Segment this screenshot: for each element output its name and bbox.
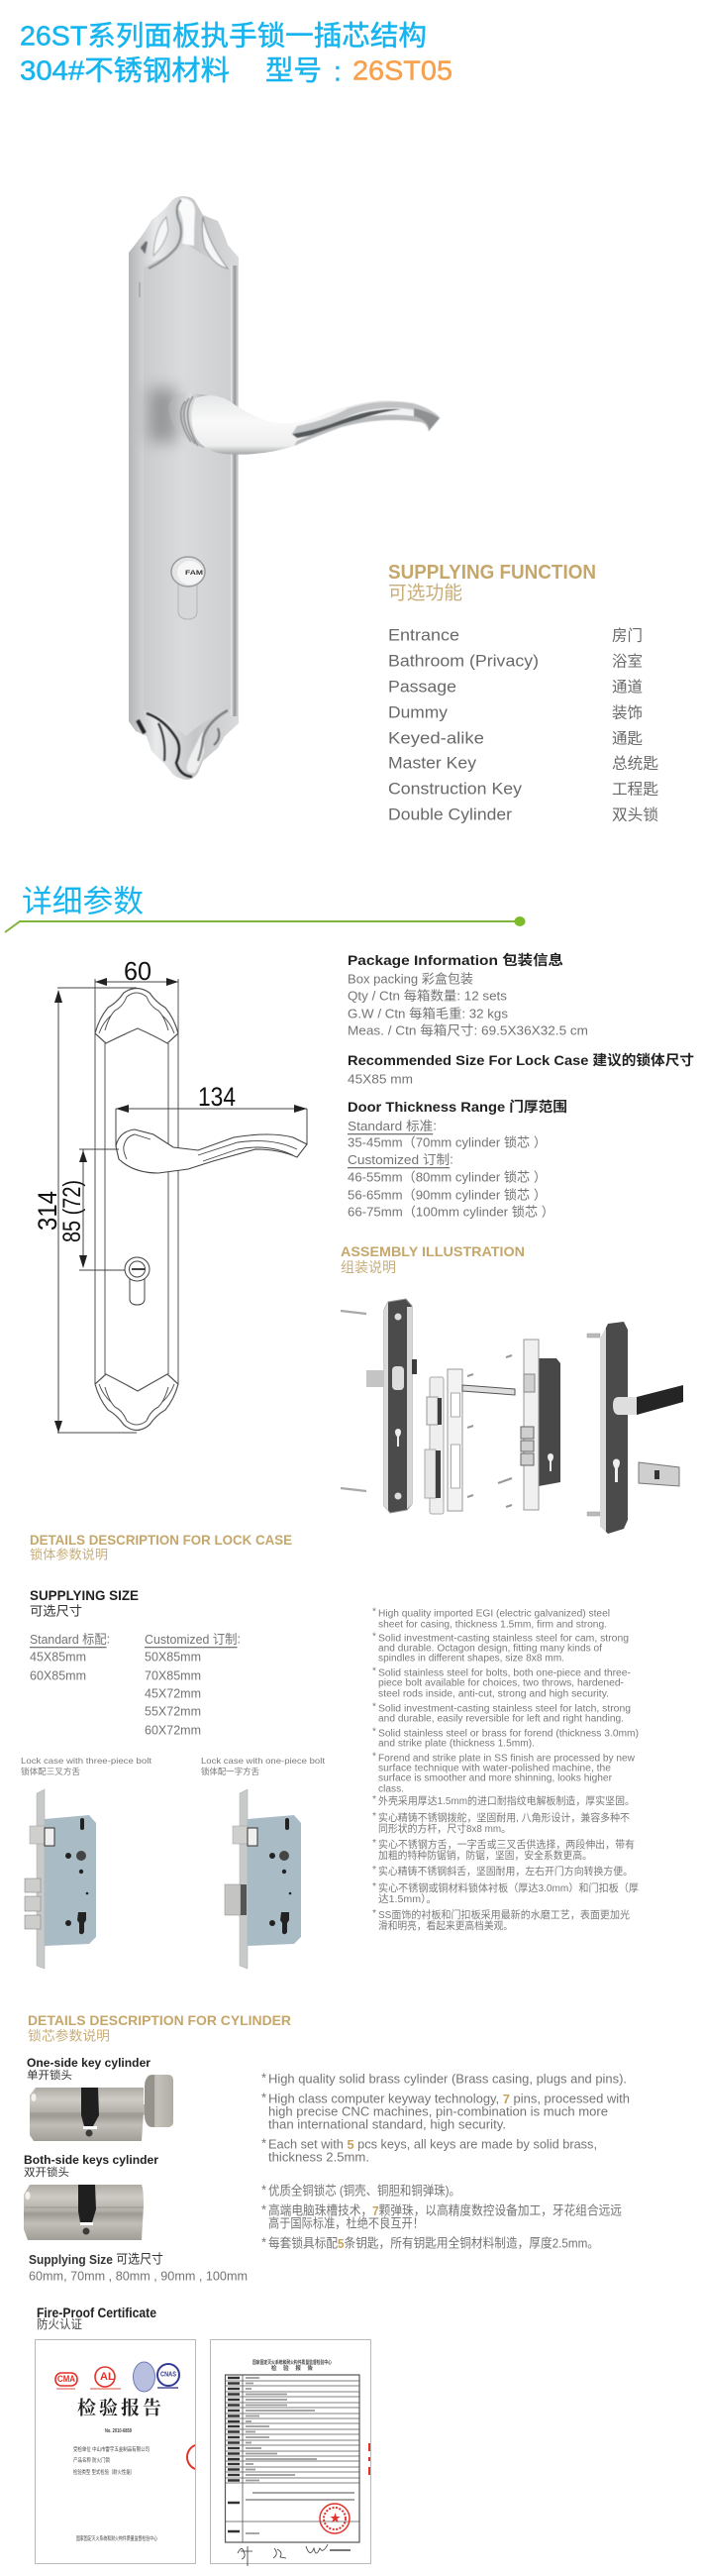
chinese feature list: * <box>372 1864 376 1876</box>
report header: 检 验 报 告 <box>271 2364 313 2372</box>
function list: 通道 <box>612 678 643 696</box>
fire-proof certificate heading: 防火认证 <box>37 2316 82 2331</box>
certificate: cover page <box>36 2340 196 2564</box>
function list: 房门 <box>612 626 643 644</box>
english feature list: spindles in different shapes, size 8x8 mm. <box>378 1653 564 1664</box>
supplying size: 45X85mm <box>30 1649 86 1664</box>
english feature list: surface is smoother and more shinning, looks higher <box>378 1773 613 1783</box>
signatures <box>238 2544 351 2566</box>
chinese feature list: 实心不锈钢方舌，一字舌或三叉舌供选择，两段伸出，带有 <box>378 1838 635 1851</box>
english feature list: Solid stainless steel for bolts, both one-piece and three- <box>378 1668 631 1678</box>
icon: CNAS logo: CNAS <box>160 2372 176 2378</box>
heading: DETAILS DESCRIPTION FOR LOCK CASE <box>30 1532 292 1548</box>
door thickness: 56-65mm（90mm cylinder 锁芯 ） <box>348 1187 547 1203</box>
stamp fragment on edge <box>368 2443 370 2475</box>
heading <box>28 2012 291 2043</box>
door thickness: Door Thickness Range 门厚范围 <box>348 1099 567 1115</box>
english feature list: Solid investment-casting stainless steel for latch, strong <box>378 1704 631 1714</box>
chinese feature list: * <box>372 1810 376 1822</box>
mortise lock body <box>521 1340 560 1510</box>
long screws <box>341 1311 366 1491</box>
chinese feature list: * <box>372 1793 376 1805</box>
chinese feature list: 加粗的特种防锯销，防锯，坚固，安全系数更高。 <box>378 1849 592 1862</box>
supplying size: 55X72mm <box>145 1704 201 1718</box>
heading: SUPPLYING FUNCTION <box>388 562 596 584</box>
chinese cylinder features: * <box>261 2182 266 2198</box>
chinese feature list: SS面饰的衬板和门扣板采用最新的水磨工艺，表面更加光 <box>378 1908 630 1921</box>
panel: lock case details <box>21 1532 639 1932</box>
lock case captions: 锁体配三叉方舌 <box>21 1767 80 1776</box>
panel: package information <box>348 952 694 1219</box>
icon: CMA logo <box>55 2373 77 2389</box>
english cylinder features: High quality solid brass cylinder (Brass casing, plugs and pins). <box>268 2071 627 2087</box>
dimension numbers: 60 <box>124 956 151 986</box>
supplying size: SUPPLYING SIZE <box>30 1587 139 1603</box>
function list: Entrance <box>388 626 459 644</box>
english feature list: * <box>372 1666 376 1676</box>
english feature list: * <box>372 1631 376 1643</box>
english feature list <box>372 1607 639 1795</box>
supplying size: 60X72mm <box>145 1722 201 1738</box>
handle outline <box>116 1129 307 1173</box>
english feature list: * <box>372 1702 376 1712</box>
lock case photo: one-piece bolt <box>225 1789 301 1969</box>
panel: cylinder details <box>24 2012 630 2283</box>
keyhole with cylinder <box>171 557 205 619</box>
bottom finial chrome <box>138 710 228 777</box>
english cylinder features: * <box>261 2136 266 2150</box>
certificate: test report page <box>210 2340 370 2566</box>
inner back plate <box>366 1299 417 1513</box>
chinese feature list: * <box>372 1880 376 1892</box>
title: : <box>334 55 342 87</box>
title: 304#不锈钢材料 <box>20 55 230 85</box>
english feature list: steel rods inside, anti-cut, strong and high security. <box>378 1688 609 1700</box>
cylinder labels <box>24 2056 158 2179</box>
report details <box>73 2428 157 2542</box>
chinese feature list: 同形状的方杆，尺寸8x8 mm。 <box>378 1822 511 1835</box>
package info: Qty / Ctn 每箱数量: 12 sets <box>348 989 508 1003</box>
report header: 国家固定灭火系统和耐火构件质量监督检验中心 <box>252 2359 332 2366</box>
chinese cylinder features <box>261 2182 622 2251</box>
english cylinder features: than international standard, high security. <box>268 2116 506 2132</box>
report details: 国家固定灭火系统和耐火构件质量监督检验中心 <box>76 2534 157 2542</box>
icon: CAL logo <box>90 2367 121 2389</box>
heading: detailed parameters <box>5 884 525 932</box>
icon: blue round seal <box>133 2362 154 2392</box>
english feature list: * <box>372 1752 376 1762</box>
english feature list: surface technique with water-polished machine, the <box>378 1764 611 1773</box>
english cylinder features: thickness 2.5mm. <box>268 2150 369 2164</box>
english feature list: sheet for casing, thickness 1.5mm, firm and strong. <box>378 1619 607 1631</box>
function list: 浴室 <box>612 652 643 670</box>
report title: 检 验 报 告 <box>77 2394 161 2419</box>
dimension drawing <box>33 956 307 1433</box>
cylinder labels: Both-side keys cylinder <box>24 2153 158 2167</box>
cylinder photo: both-side keys <box>24 2185 144 2240</box>
dimension numbers: 134 <box>198 1082 236 1112</box>
supplying size: 70X85mm <box>145 1668 201 1682</box>
function list: 工程匙 <box>612 781 658 799</box>
english feature list: Forend and strike plate in SS finish are processed by new <box>378 1754 636 1764</box>
english feature list: and strike plate (thickness 1.5mm). <box>378 1738 535 1750</box>
lever handle <box>168 392 441 455</box>
package info: Package Information 包装信息 <box>348 952 563 968</box>
package info: G.W / Ctn 每箱毛重: 32 kgs <box>348 1007 509 1020</box>
heading <box>388 562 596 604</box>
chinese cylinder features: * <box>261 2235 266 2249</box>
english feature list: Solid stainless steel or brass for forend (thickness 3.0mm) <box>378 1728 639 1740</box>
outer plate with lever <box>587 1322 683 1534</box>
supplying size: 45X72mm <box>145 1686 201 1700</box>
forend strip <box>448 1369 515 1511</box>
recommended size: Recommended Size For Lock Case 建议的锁体尺寸 <box>348 1052 694 1068</box>
door thickness: 35-45mm（70mm cylinder 锁芯 ） <box>348 1135 547 1149</box>
cylinder labels: 双开锁头 <box>24 2165 69 2179</box>
chinese feature list: 实心不锈钢或铜材料锁体衬板（厚达3.0mm）和门扣板（厚 <box>378 1881 639 1894</box>
chinese feature list <box>372 1793 639 1932</box>
dimension numbers: 85 (72) <box>58 1180 86 1242</box>
lever shadow on plate <box>149 388 176 442</box>
function list: 通匙 <box>612 729 643 747</box>
package info <box>348 952 588 1038</box>
supplying size: Supplying Size 可选尺寸 <box>29 2251 163 2267</box>
function list: 总统匙 <box>612 755 658 773</box>
report details: 受检单位 中山市雷宇五金制品有限公司 <box>73 2445 150 2453</box>
function list: Keyed-alike <box>388 729 484 747</box>
heading <box>30 1532 292 1561</box>
panel: supplying function <box>388 562 658 824</box>
chinese feature list: * <box>372 1837 376 1849</box>
chinese cylinder features: * <box>261 2201 266 2217</box>
english cylinder features: high precise CNC machines, pin-combination is much more <box>268 2104 608 2118</box>
report header <box>252 2359 332 2372</box>
lock case photo: three-piece bolt <box>25 1789 96 1969</box>
cylinder hole outline <box>125 1257 150 1305</box>
dimension numbers <box>33 956 236 1242</box>
supplying size: 60mm, 70mm , 80mm , 90mm , 100mm <box>29 2269 248 2283</box>
english cylinder features: High class computer keyway technology, 7 pins, processed with <box>268 2091 630 2106</box>
supplying size: 50X85mm <box>145 1649 201 1664</box>
package info: Box packing 彩盒包装 <box>348 971 473 987</box>
small screws <box>467 1355 512 1507</box>
english cylinder features: * <box>261 2091 266 2104</box>
report details: No. 2010-6859 <box>105 2428 132 2434</box>
english feature list: and durable, easily reversible for left and right handing. <box>378 1714 624 1724</box>
icon: CNAS logo <box>157 2364 179 2388</box>
english feature list: and durable. Octagon design, fitting many kinds of <box>378 1643 602 1655</box>
chinese cylinder features: 每套锁具标配5条钥匙，所有钥匙用全铜材料制造，厚度2.5mm。 <box>268 2235 599 2251</box>
exploded cylinder <box>639 1462 679 1486</box>
assembly illustration heading <box>341 1243 525 1275</box>
assembly illustration heading: 组装说明 <box>341 1259 396 1275</box>
title: 26ST系列面板执手锁一插芯结构 <box>20 20 427 52</box>
chinese feature list: 滑和明亮，看起来更高档美观。 <box>378 1919 513 1932</box>
heading: detailed parameters: 详细参数 <box>22 884 144 919</box>
supplying size: Customized 订制: <box>145 1631 241 1647</box>
supplying size <box>29 2251 248 2283</box>
red round stamp: ★ <box>330 2513 341 2524</box>
report table <box>225 2375 359 2542</box>
function list: Master Key <box>388 753 477 773</box>
chinese feature list: 达1.5mm）。 <box>378 1893 437 1905</box>
english feature list: piece bolt available for choices, two throws, hardened- <box>378 1678 624 1688</box>
heading: DETAILS DESCRIPTION FOR CYLINDER <box>28 2012 291 2028</box>
function list: Double Cylinder <box>388 805 512 824</box>
heading: 可选功能 <box>388 583 462 604</box>
right edge strip <box>231 266 239 716</box>
function list: Bathroom (Privacy) <box>388 652 539 670</box>
chinese cylinder features: 高于国际标准，杜绝不良互开！ <box>268 2215 424 2231</box>
english cylinder features: Each set with 5 pcs keys, all keys are made by solid brass, <box>268 2136 597 2152</box>
function list: Dummy <box>388 703 449 721</box>
title: 型号 <box>265 55 322 85</box>
english feature list: Solid investment-casting stainless steel for cam, strong <box>378 1633 629 1645</box>
fire-proof certificate heading <box>37 2305 156 2331</box>
supplying size <box>30 1587 241 1738</box>
title <box>20 20 452 87</box>
english feature list: class. <box>378 1783 404 1795</box>
icon: CAL logo: AL <box>100 2371 115 2383</box>
chinese feature list: 实心精铸不锈钢拨舵，坚固耐用, 八角形设计，兼容多种不 <box>378 1811 630 1824</box>
door thickness: 66-75mm（100mm cylinder 锁芯 ） <box>348 1205 554 1219</box>
top finial chrome <box>140 198 228 297</box>
english feature list: * <box>372 1607 376 1617</box>
supplying size: 60X85mm <box>30 1668 86 1682</box>
chinese cylinder features: 优质全铜锁芯 (铜壳、铜胆和铜弹珠)。 <box>268 2184 460 2198</box>
keyhole with cylinder: FAM <box>185 571 203 577</box>
lock case captions <box>21 1756 326 1776</box>
door thickness: 46-55mm（80mm cylinder 锁芯 ） <box>348 1169 547 1185</box>
cylinder labels: One-side key cylinder <box>27 2056 151 2070</box>
door thickness: Standard 标准 : <box>348 1118 437 1133</box>
lock case captions: Lock case with one-piece bolt <box>201 1756 326 1766</box>
function list: Construction Key <box>388 779 523 799</box>
function list: Passage <box>388 678 456 696</box>
assembly exploded diagram <box>341 1299 683 1534</box>
lock case captions: 锁体配一字方舌 <box>201 1767 259 1776</box>
strike plate with boxes <box>425 1377 444 1514</box>
fire-proof certificate heading: Fire-Proof Certificate <box>37 2305 156 2320</box>
english cylinder features <box>261 2071 630 2164</box>
chinese cylinder features: 高端电脑珠槽技术，7颗弹珠，以高精度数控设备加工，牙花组合远远 <box>268 2203 622 2217</box>
supplying size: 可选尺寸 <box>30 1603 82 1619</box>
lock case captions: Lock case with three-piece bolt <box>21 1756 152 1766</box>
brushed inner panel <box>144 244 231 736</box>
partial red stamp <box>187 2445 195 2469</box>
door thickness: Customized 订制 : <box>348 1151 453 1167</box>
cylinder labels: 单开锁头 <box>27 2068 72 2082</box>
cylinder photo: one-side key <box>30 2075 173 2141</box>
chinese feature list: 外壳采用厚达1.5mm的进口耐指纹电解板制造，厚实坚固。 <box>378 1794 635 1807</box>
recommended size: 45X85 mm <box>348 1072 413 1086</box>
recommended size <box>348 1052 694 1086</box>
red round stamp <box>320 2504 350 2533</box>
heading: 锁体参数说明 <box>30 1548 108 1561</box>
english feature list: High quality imported EGI (electric galvanized) steel <box>378 1609 610 1619</box>
chinese feature list: 实心精铸不锈钢斜舌，坚固耐用，左右开门方向转换方便。 <box>378 1865 633 1878</box>
english feature list: * <box>372 1726 376 1738</box>
heading: 锁芯参数说明 <box>28 2027 110 2043</box>
function list <box>388 626 658 824</box>
product photo: door handle plate <box>129 196 441 780</box>
report details: 检验类型 型式检验（耐火性能） <box>73 2468 135 2476</box>
report details: 产品名称 防火门锁 <box>73 2456 110 2464</box>
icon: CMA logo: CMA <box>57 2374 75 2384</box>
assembly illustration heading: ASSEMBLY ILLUSTRATION <box>341 1243 525 1259</box>
dimension lines and arrows <box>54 978 307 1433</box>
plate outline <box>95 979 178 1431</box>
package info: Meas. / Ctn 每箱尺寸: 69.5X36X32.5 cm <box>348 1022 588 1038</box>
door thickness <box>348 1099 567 1219</box>
function list: 双头锁 <box>612 806 658 824</box>
plate body <box>129 196 239 780</box>
chinese feature list: * <box>372 1907 376 1919</box>
supplying size: Standard 标配: <box>30 1631 110 1647</box>
title: 26ST05 <box>352 55 452 85</box>
function list: 装饰 <box>612 703 643 721</box>
english cylinder features: * <box>261 2071 266 2085</box>
dimension numbers: 314 <box>33 1191 62 1231</box>
